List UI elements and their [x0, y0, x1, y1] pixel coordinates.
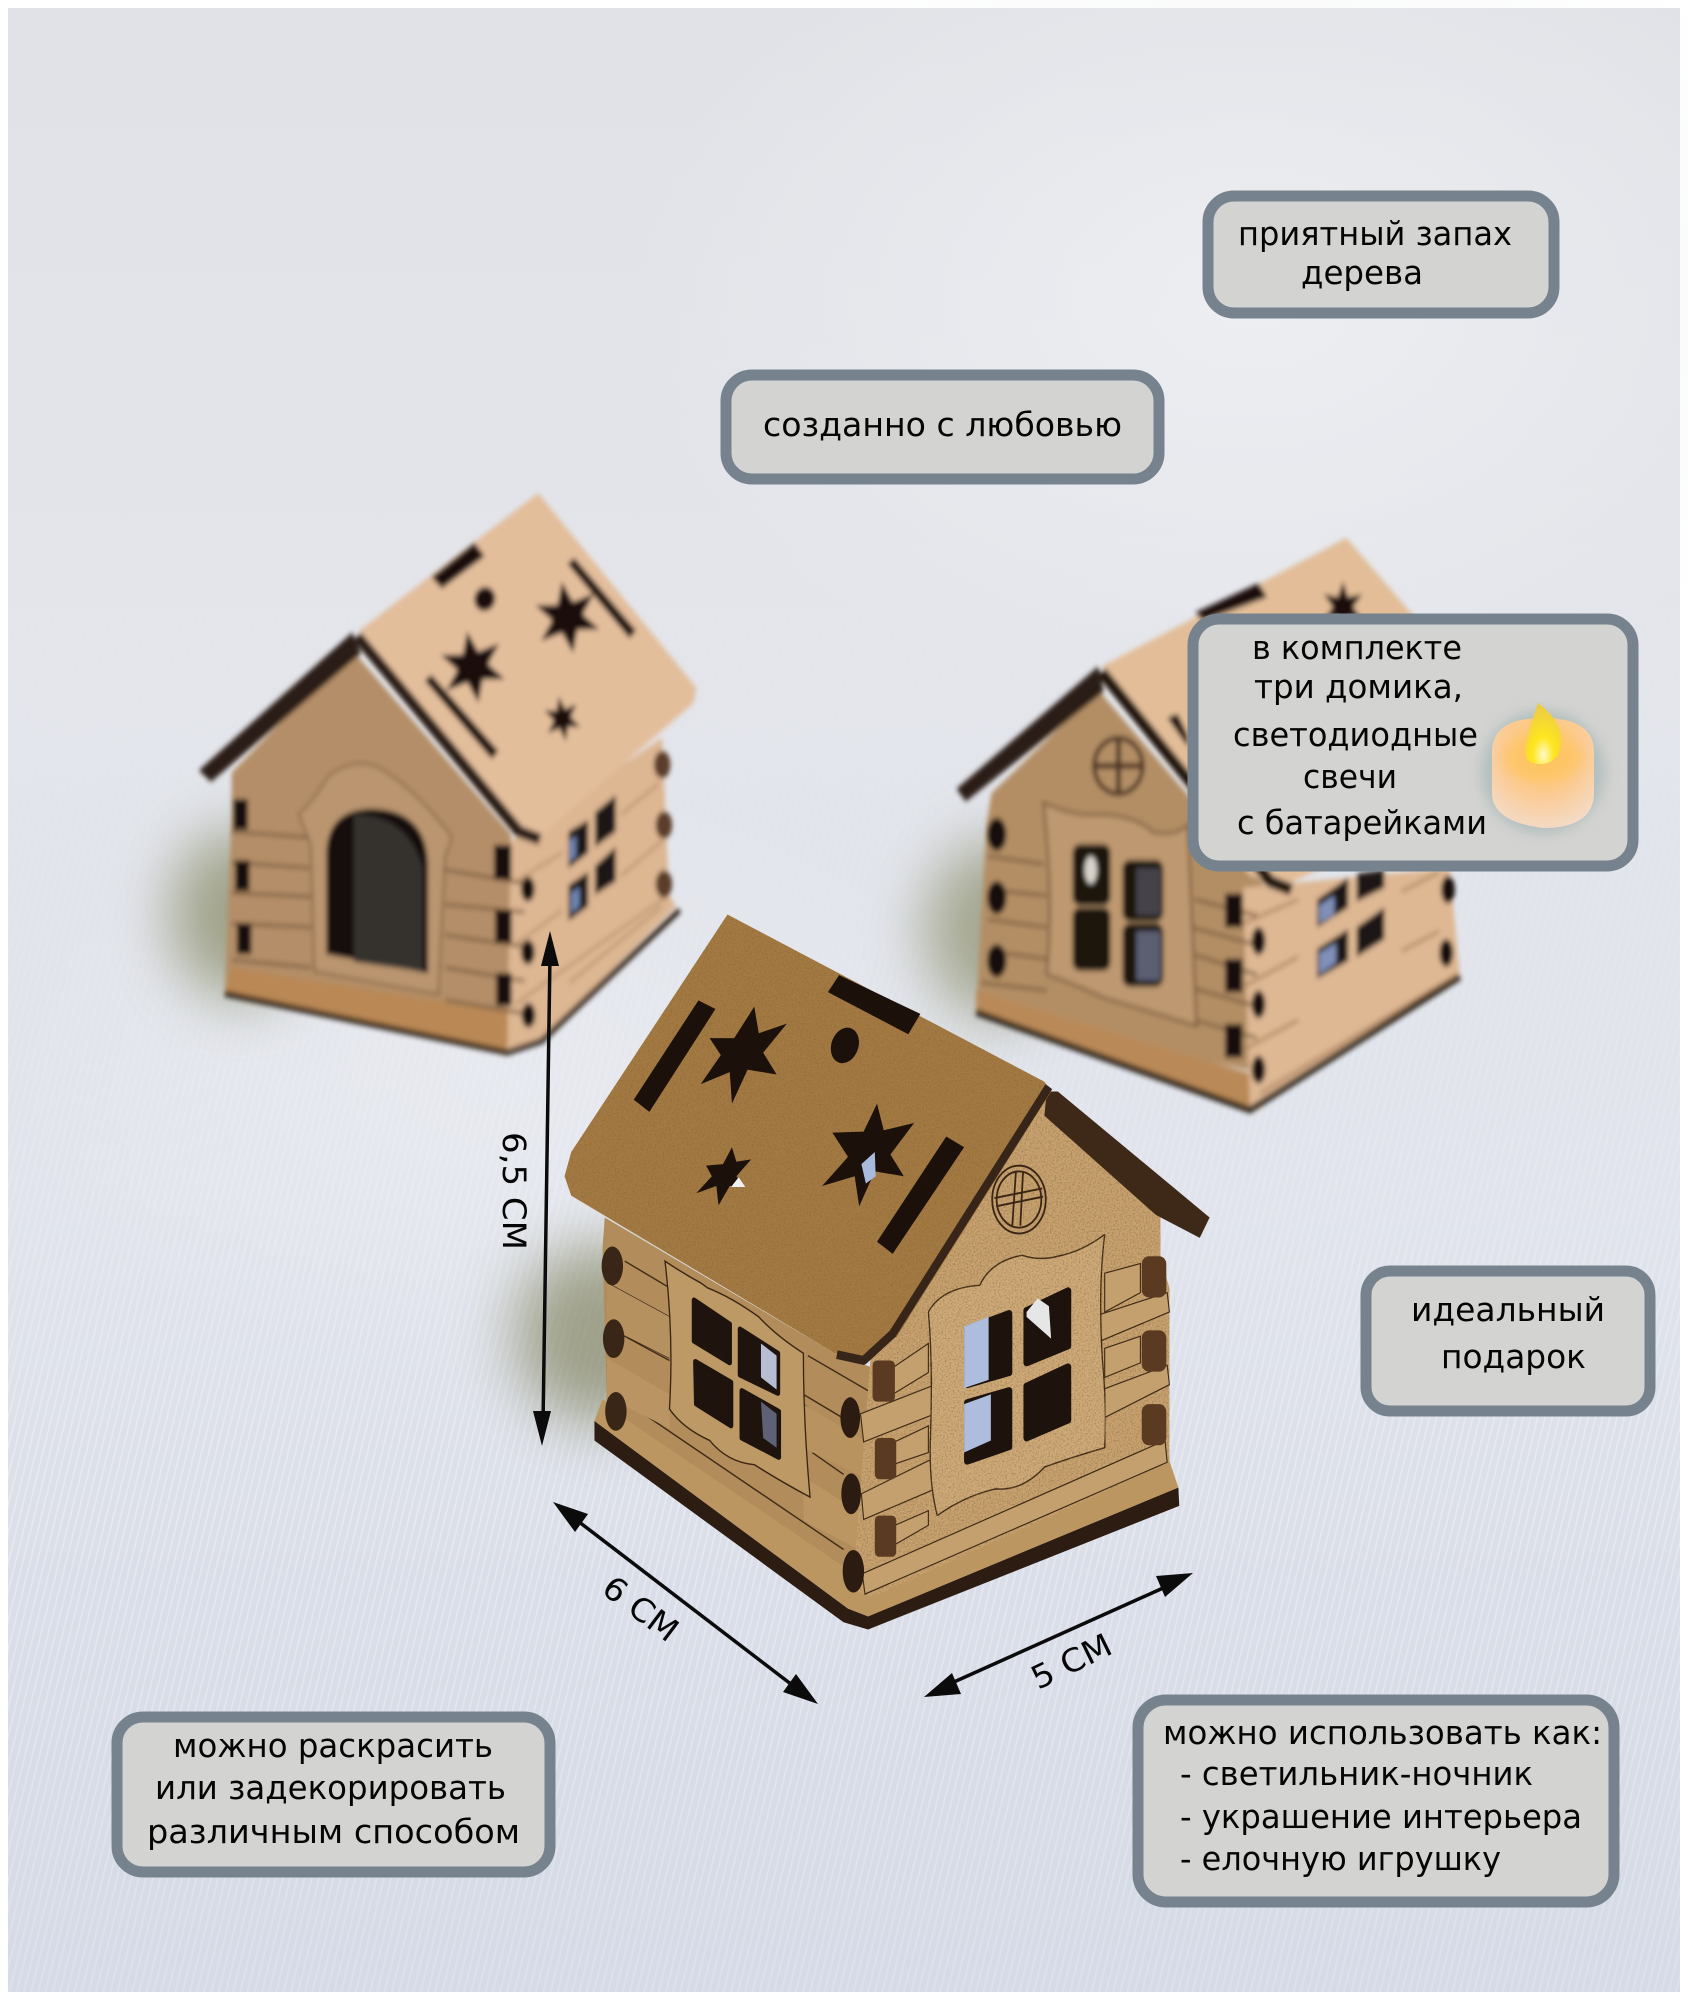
photo: left back house: [199, 493, 697, 1052]
base board: [594, 1399, 1179, 1629]
dimension label: 5 cm: 5 СМ: [1025, 1626, 1118, 1697]
callout: made with love: созданно с любовью: [763, 405, 1122, 444]
callout: can be painted: можно раскрасить: [173, 1726, 493, 1765]
callout: usage list: [1138, 1700, 1614, 1902]
dimension arrow: depth 5 cm: [924, 1573, 1193, 1697]
callout: perfect gift: подарок: [1441, 1337, 1586, 1376]
left window frame: [665, 1261, 810, 1497]
callout: set contents with candle: с батарейками: [1237, 803, 1487, 842]
callout: made with love: [726, 375, 1159, 479]
callout: set contents with candle: [1193, 619, 1633, 866]
round attic ornament: [992, 1166, 1046, 1233]
callout: can be painted: различным способом: [147, 1812, 520, 1851]
callout: pleasant wood smell: дерева: [1301, 253, 1423, 292]
callout: perfect gift: идеальный: [1411, 1290, 1605, 1329]
photo: front house: [565, 915, 1210, 1629]
right gable wall: [602, 1091, 1169, 1598]
dimension label: 6 cm: 6 СМ: [595, 1568, 686, 1650]
icon: LED candle: [1481, 703, 1605, 834]
callout: usage list: - елочную игрушку: [1180, 1839, 1501, 1878]
callout: usage list: - украшение интерьера: [1180, 1797, 1582, 1836]
callout: set contents with candle: светодиодные: [1233, 715, 1478, 754]
callout: usage list: - светильник-ночник: [1180, 1754, 1533, 1793]
callout: set contents with candle: в комплекте: [1252, 628, 1462, 667]
callout: can be painted: [117, 1717, 550, 1872]
right window frame: [928, 1234, 1105, 1516]
dimension label: 6,5 cm: 6,5 СМ: [495, 1132, 533, 1250]
photo: right back house: [957, 538, 1477, 1110]
roof cut-outs: [634, 975, 964, 1254]
dimension arrow: width 6 cm: [553, 1502, 818, 1704]
callout: usage list: можно использовать как:: [1163, 1713, 1602, 1752]
callout: pleasant wood smell: приятный запах: [1238, 214, 1512, 253]
callout: set contents with candle: свечи: [1303, 757, 1397, 796]
callout: pleasant wood smell: [1208, 196, 1554, 313]
callout: can be painted: или задекорировать: [155, 1768, 506, 1807]
shadows of the houses: [170, 830, 1075, 1425]
back eave: [1044, 1091, 1210, 1238]
dimension arrow: height: [533, 931, 559, 1446]
callout: set contents with candle: три домика,: [1254, 667, 1463, 706]
left wall with logs: [602, 1217, 875, 1576]
roof panel: [565, 915, 1051, 1360]
callout: perfect gift: [1366, 1271, 1650, 1411]
